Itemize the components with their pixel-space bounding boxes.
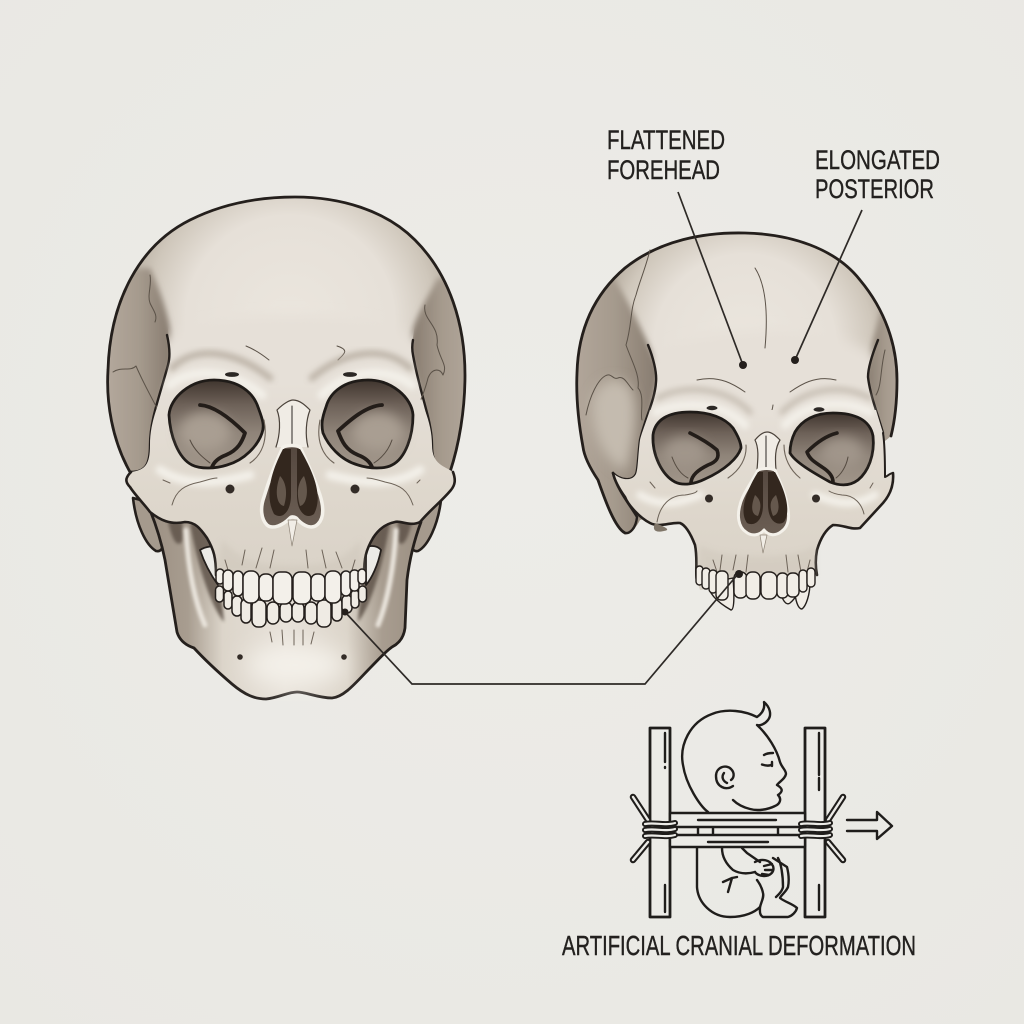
supraorbital notches bbox=[706, 406, 718, 410]
jaw gaps bbox=[200, 546, 381, 585]
left eye socket bbox=[653, 412, 741, 484]
left sticks bbox=[633, 797, 648, 860]
forehead blend bbox=[157, 329, 426, 413]
mastoid processes bbox=[133, 498, 441, 551]
right eye socket bbox=[322, 380, 413, 468]
side boundary lines bbox=[131, 335, 452, 472]
supraorbital notches bbox=[225, 372, 239, 377]
diaper crease bbox=[723, 877, 737, 892]
callout: flattened forehead bbox=[607, 125, 747, 369]
cranium dome and rear vault bbox=[577, 233, 897, 533]
nasal cavity bbox=[738, 468, 789, 535]
left board bbox=[650, 728, 670, 917]
infographic illustration bbox=[106, 130, 940, 956]
cranial sutures bbox=[586, 250, 885, 428]
right rope wraps bbox=[801, 823, 830, 836]
right eye socket bbox=[790, 413, 873, 485]
nasal bones bbox=[728, 432, 800, 478]
nasal bones bbox=[250, 400, 334, 463]
callout: flattened forehead: FLATTENED bbox=[607, 125, 725, 155]
band marks bbox=[698, 820, 776, 842]
infraorbital foramina bbox=[705, 494, 713, 502]
left eye socket bbox=[169, 380, 263, 468]
cranium outline bbox=[577, 233, 897, 533]
callout: elongated posterior bbox=[791, 145, 940, 364]
brow shadow bbox=[658, 390, 870, 412]
lower teeth bbox=[216, 586, 366, 627]
rear side shading bbox=[560, 275, 910, 540]
facial sutures and roots bbox=[650, 482, 873, 575]
nasal spine bbox=[288, 520, 297, 546]
infraorbital foramina bbox=[226, 484, 234, 494]
maxilla shading bbox=[698, 545, 815, 578]
board highlight marks bbox=[665, 733, 819, 912]
connector line between jaws bbox=[342, 570, 743, 684]
left rope wraps bbox=[645, 823, 675, 836]
callout: elongated posterior: ELONGATED bbox=[815, 145, 940, 175]
temporal side shading bbox=[100, 268, 480, 480]
arrow bbox=[847, 812, 892, 839]
baby leg bbox=[757, 858, 797, 917]
baby eye and brow bbox=[762, 753, 773, 766]
facial sutures and roots bbox=[163, 478, 420, 645]
baby body bbox=[697, 848, 760, 917]
mental foramina bbox=[237, 654, 243, 660]
right skull: deformed cranium bbox=[560, 233, 910, 610]
baby hand bbox=[755, 860, 773, 876]
baby ear bbox=[716, 767, 734, 788]
inner jaw shadow bbox=[168, 520, 412, 622]
binding bands bbox=[670, 813, 805, 847]
lower face bone bbox=[613, 410, 893, 590]
icon: infant bound between boards bbox=[633, 702, 892, 917]
teeth bbox=[696, 566, 815, 610]
nasal spine bbox=[760, 535, 767, 553]
maxilla shading bbox=[216, 540, 364, 575]
nasal cavity bbox=[262, 446, 323, 527]
zygomatic shadow bbox=[654, 523, 667, 532]
forehead blend bbox=[650, 346, 875, 410]
baby head bbox=[682, 702, 786, 812]
right board bbox=[805, 728, 825, 917]
upper teeth bbox=[216, 569, 366, 604]
brow highlight bbox=[640, 404, 875, 503]
left skull: normal cranium bbox=[100, 197, 480, 699]
callout: flattened forehead: FOREHEAD bbox=[607, 155, 720, 185]
jaw ridge highlights bbox=[186, 530, 396, 625]
cranium dome bbox=[108, 197, 465, 472]
right sticks bbox=[828, 797, 843, 860]
sutures on the cranium bbox=[113, 275, 445, 412]
lighter rear patch bbox=[592, 380, 635, 470]
chin highlight bbox=[246, 645, 346, 685]
callout: elongated posterior: POSTERIOR bbox=[815, 174, 934, 204]
brow highlight bbox=[160, 373, 420, 482]
side boundary lines bbox=[613, 340, 883, 479]
mandible bbox=[150, 500, 421, 699]
brow shadow bbox=[172, 353, 410, 378]
face bone bbox=[127, 380, 455, 590]
cranium outline bbox=[108, 197, 465, 472]
